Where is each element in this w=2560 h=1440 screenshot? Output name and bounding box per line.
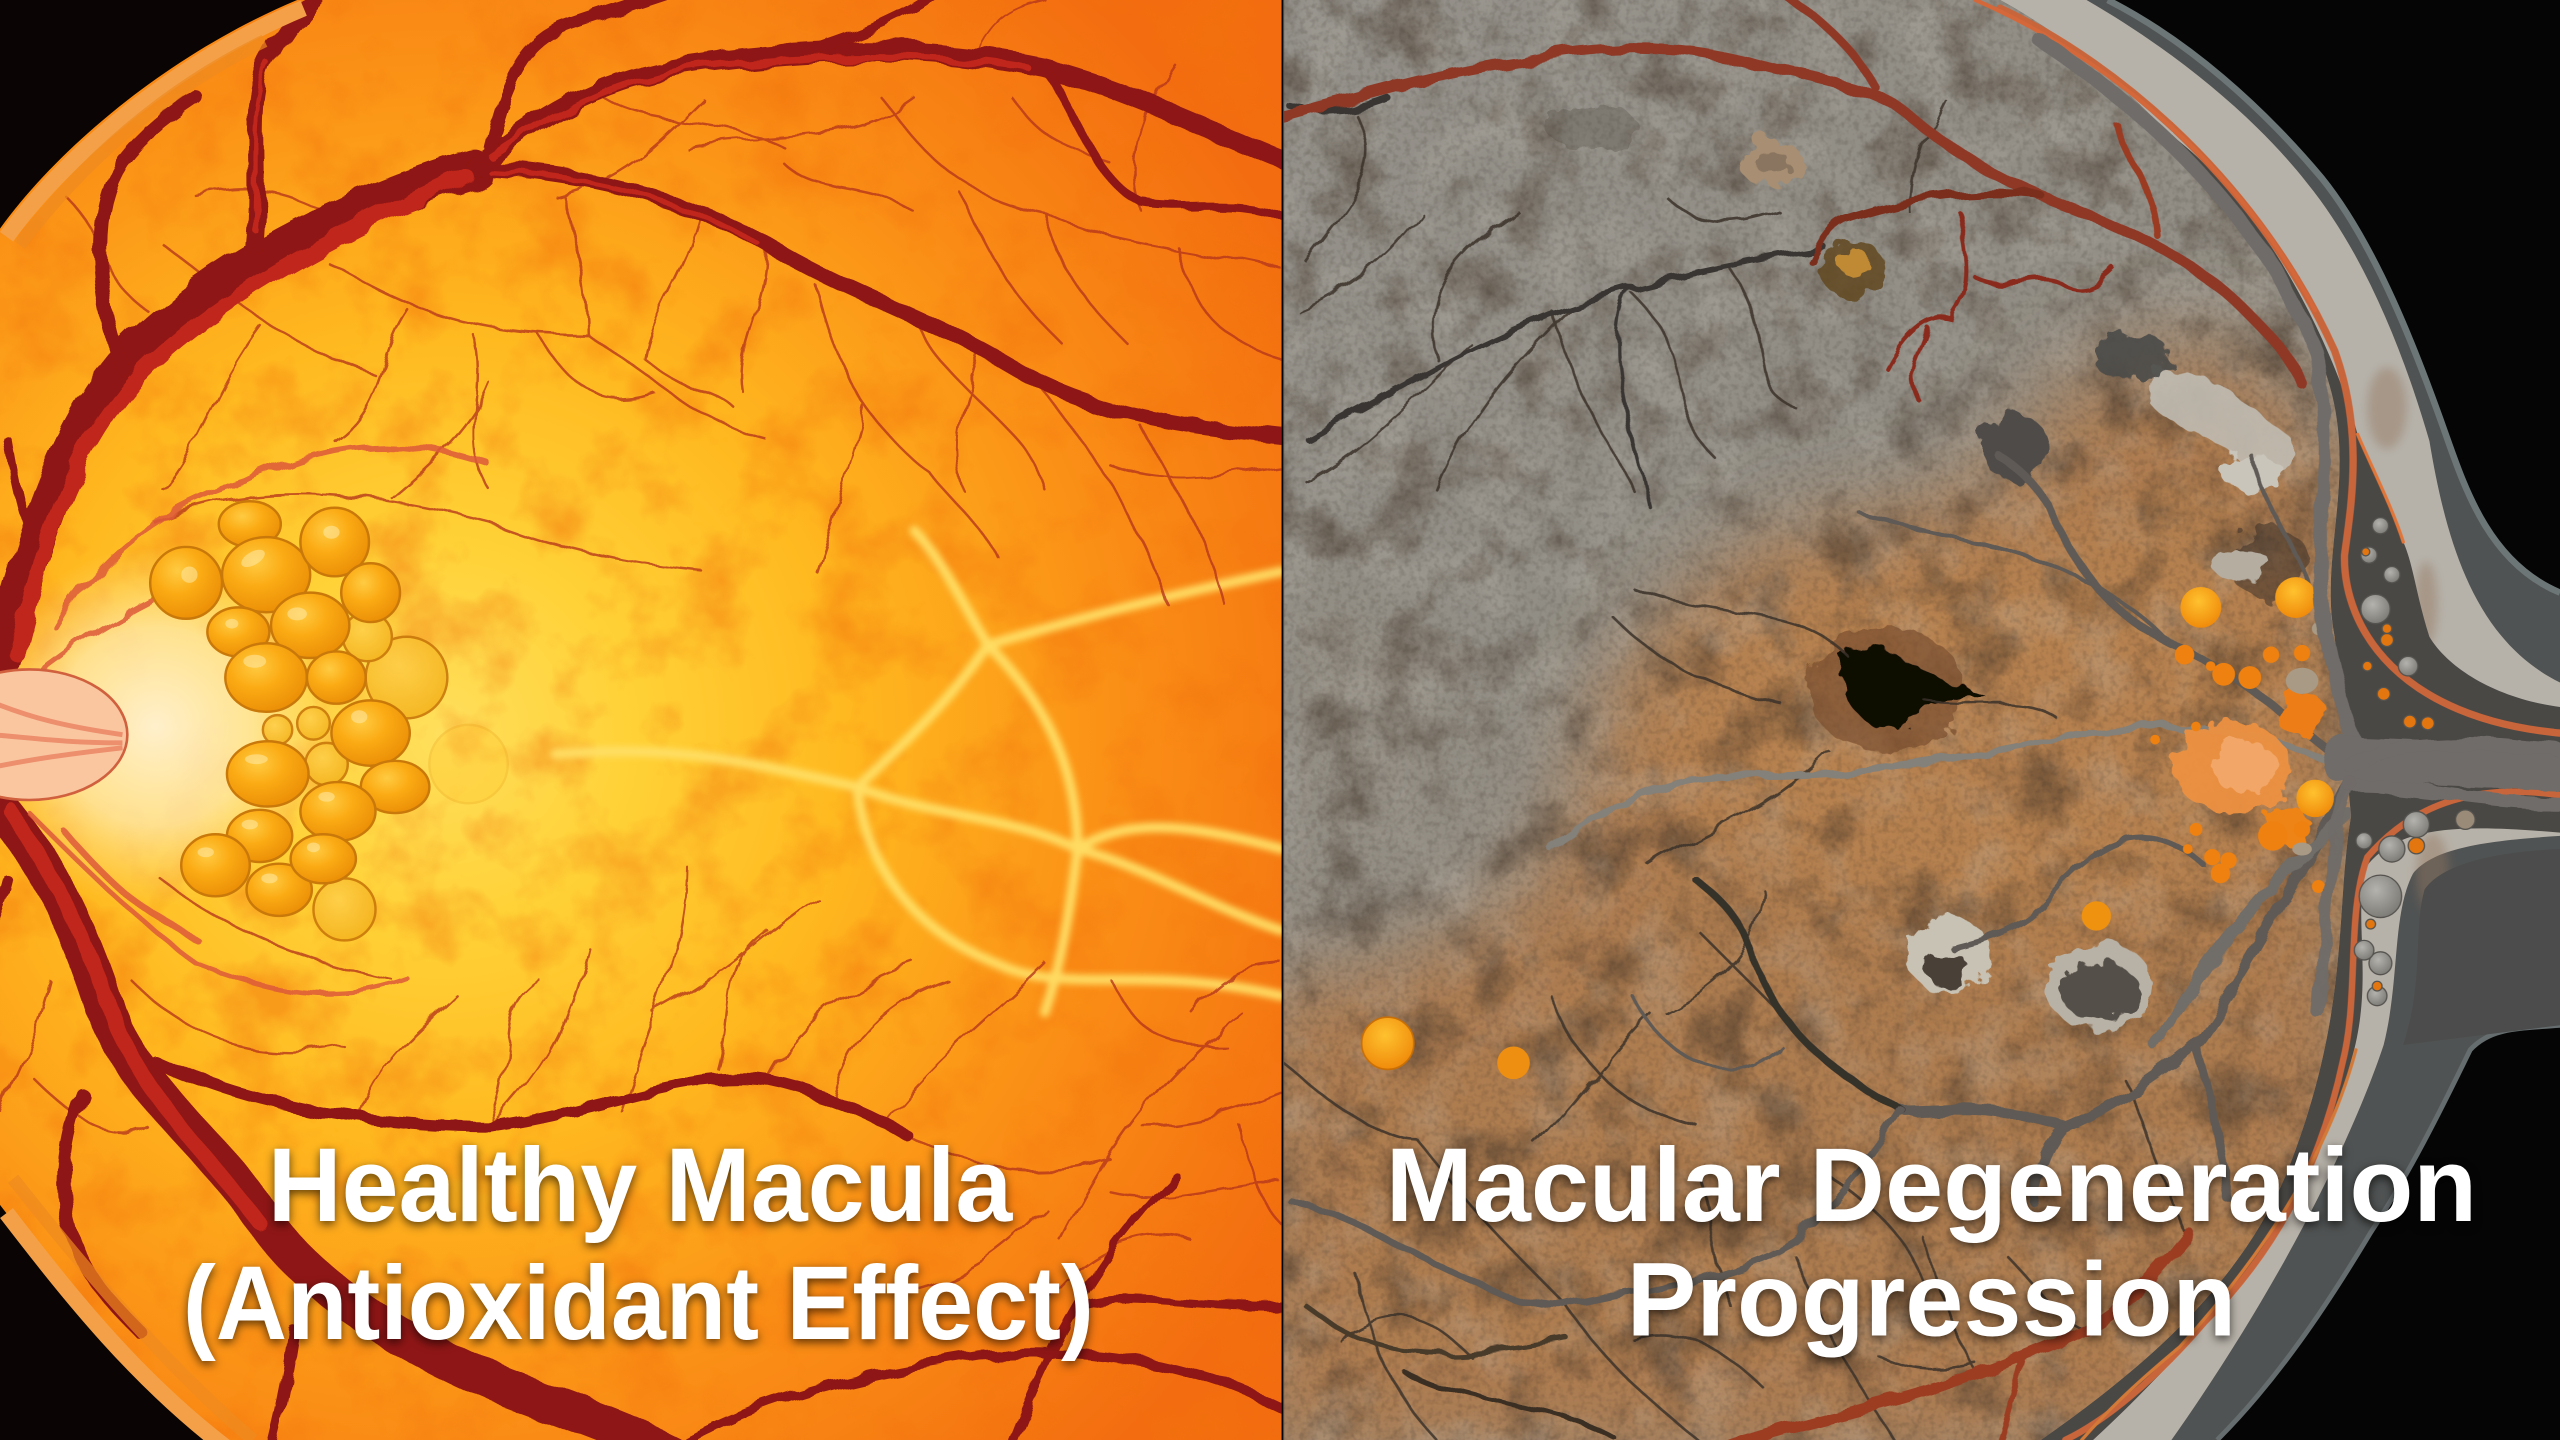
title: macular degeneration progression: Macular Degeneration (1386, 1127, 2477, 1244)
gray degenerated veins (1283, 0, 2351, 1440)
optic disc (0, 669, 127, 800)
dark veins upper retina (1290, 98, 1825, 506)
tan stains on sclera (2367, 367, 2449, 914)
dark noise texture (1283, 0, 2560, 1440)
atrophy patches (1546, 104, 2310, 1030)
fine branching veins (0, 0, 1282, 1306)
outer eye wall, dark band (1283, 0, 2560, 1440)
panel: macular degeneration (1241, 0, 2560, 1440)
pale lesion lower (1907, 918, 1992, 993)
macula glow (18, 555, 323, 898)
pale patch upper right (2147, 367, 2296, 477)
eye rim (7, 8, 304, 1440)
dark lesion lower (2046, 942, 2153, 1030)
dark inner lining (1283, 0, 2560, 1440)
fine grain (1283, 0, 2560, 1440)
brown ring lesion upper (1740, 139, 1802, 188)
cracks and dark fine veins (1282, 98, 2188, 1440)
dark lesion upper right (2091, 331, 2170, 380)
lower red vein (1731, 1233, 2188, 1440)
retina background (0, 0, 1282, 1440)
dark corners outside the eye (0, 0, 297, 1440)
major red blood vessels (0, 0, 1290, 1440)
red veins (1283, 0, 2302, 384)
central dark hole (1807, 627, 1964, 751)
retina interior (1241, 0, 2560, 1440)
black background (1283, 0, 2560, 1440)
title: healthy macula: (Antioxidant Effect) (183, 1245, 1094, 1362)
title: healthy macula: Healthy Macula (268, 1127, 1013, 1244)
dark lesion centre (1980, 415, 2049, 480)
title: macular degeneration progression (1386, 1127, 2477, 1359)
faded drusen (263, 612, 508, 940)
title: healthy macula (183, 1127, 1094, 1362)
dark spots upper (1546, 104, 1638, 150)
orange inflammation blob (2173, 694, 2328, 844)
lower dark lobe (2403, 849, 2560, 1045)
panel: healthy macula (0, 0, 1290, 1440)
drusen cluster (150, 501, 508, 940)
orange drusen deposits (1362, 577, 2334, 1079)
pebbles pocket lower (2354, 810, 2475, 1006)
drusen highlights (181, 526, 367, 883)
orange mottling texture (0, 0, 1282, 1440)
retina gray base (1283, 0, 2351, 1440)
gray inner membrane and nerve trunk (2041, 41, 2560, 1012)
light noise texture (1283, 0, 2560, 1440)
pale sclera band (2000, 0, 2560, 718)
gray haze at left (1273, 522, 1535, 947)
brown atrophy zone (1241, 346, 2367, 1440)
left-to-right panel divider (1282, 0, 1284, 1440)
yellow network vessels (555, 531, 1282, 1012)
title: macular degeneration progression: Progression (1627, 1242, 2236, 1359)
pebbles pocket upper (2361, 518, 2434, 730)
thin red squiggles (1886, 212, 2114, 400)
bright drusen (150, 501, 429, 916)
orange membrane line (1976, 0, 2560, 1440)
